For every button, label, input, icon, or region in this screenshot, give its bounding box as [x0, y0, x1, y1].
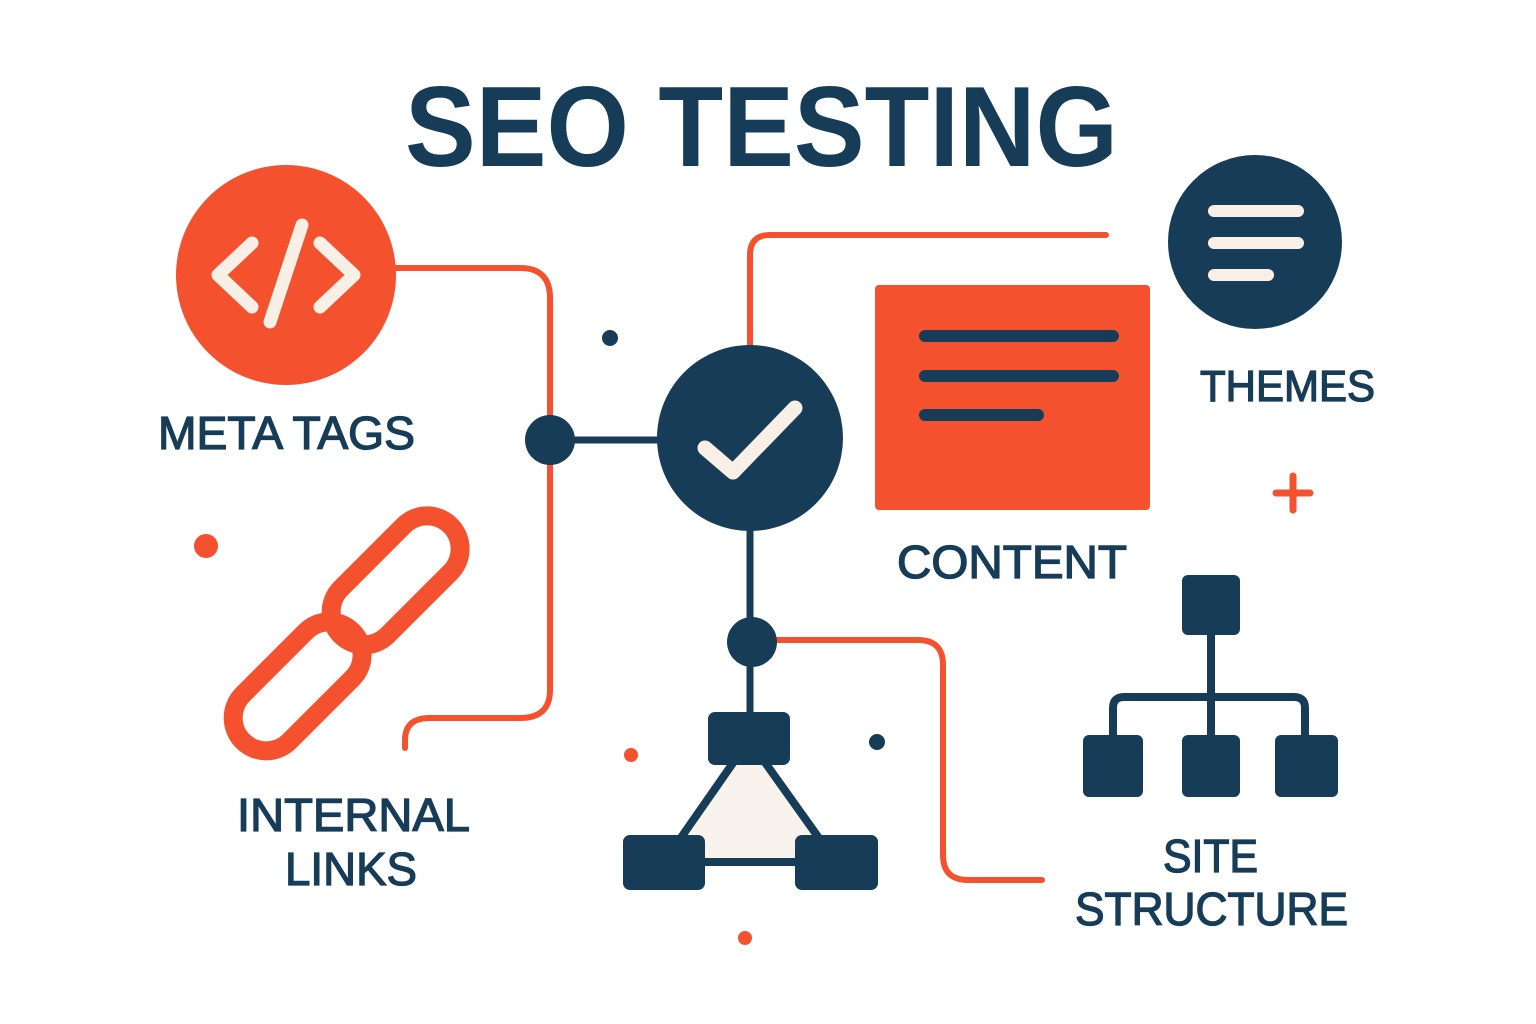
label: site structure: STRUCTURE — [1075, 883, 1348, 935]
label: meta tags: META TAGS — [158, 407, 415, 459]
icon: check circle — [657, 345, 843, 531]
node: left junction — [525, 415, 575, 465]
connector: node to site structure — [775, 640, 1042, 880]
icon: content document — [875, 285, 1150, 510]
icon: plus — [1276, 476, 1310, 510]
label: site structure: SITE — [1163, 830, 1258, 882]
label: internal links: LINKS — [285, 843, 417, 895]
title: SEO TESTING — [405, 64, 1118, 191]
decorative dots — [194, 330, 885, 945]
label: internal links: INTERNAL — [237, 789, 470, 841]
node: bottom junction — [727, 617, 777, 667]
label: content: CONTENT — [897, 536, 1127, 588]
connector: meta tags to internal links — [392, 268, 550, 748]
label: themes: THEMES — [1200, 362, 1375, 411]
icon: network triangle — [623, 712, 878, 890]
icon: meta tags code circle — [176, 165, 396, 385]
icon: themes circle — [1168, 155, 1342, 329]
icon: site structure — [1083, 575, 1338, 797]
label: site structure — [1075, 830, 1348, 935]
icon: internal links chain — [220, 502, 474, 764]
connector: check to themes — [750, 235, 1106, 350]
label: internal links — [237, 789, 470, 895]
connector: navy links — [570, 440, 750, 715]
